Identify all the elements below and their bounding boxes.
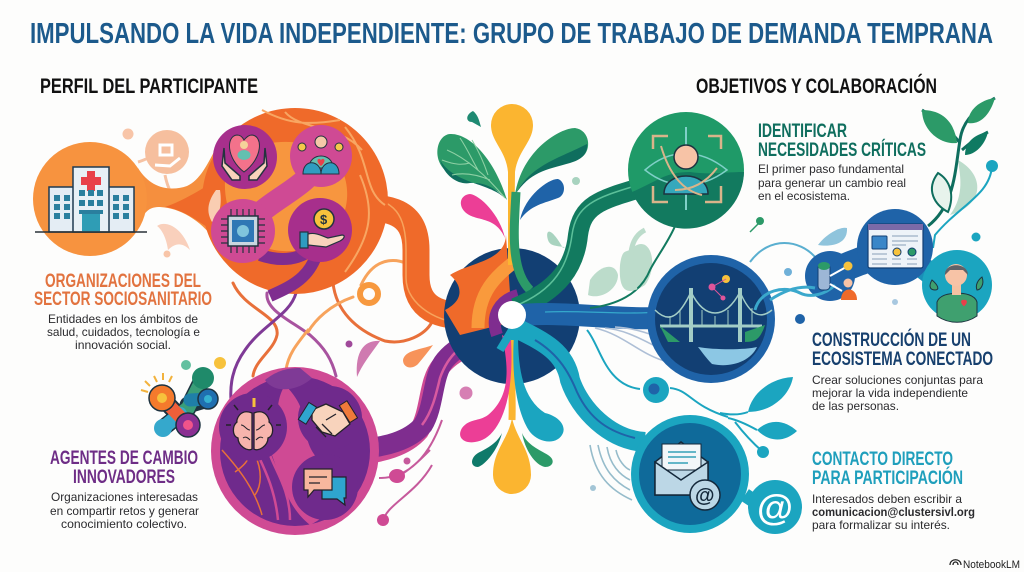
- text: contacto directo para participación: Interesados deben escribir a: [812, 492, 962, 506]
- blue curve to bridge: [512, 314, 660, 318]
- text: identificar necesidades críticas: para generar un cambio real: [758, 176, 906, 190]
- deco peach shapes: [122, 128, 190, 258]
- icon: pink leaf: [461, 194, 505, 238]
- text: organizaciones del sector sociosanitario: ORGANIZACIONES DEL: [45, 270, 201, 292]
- text: agentes de cambio innovadores: [50, 447, 199, 531]
- orange band to hub: [355, 207, 505, 316]
- text: agentes de cambio innovadores: en compartir retos y generar: [50, 504, 199, 518]
- icon: hand with coin: [288, 198, 352, 262]
- panel: email contact: [631, 377, 802, 534]
- icon: hands and heart: [213, 125, 277, 189]
- text: contacto directo para participación: CONTACTO DIRECTO: [812, 448, 953, 470]
- icon: colourful molecule logo: [141, 357, 226, 437]
- text: organizaciones del sector sociosanitario: salud, cuidados, tecnología e: [47, 325, 200, 339]
- @ badge: [748, 480, 802, 534]
- web panel: [857, 209, 933, 285]
- icon: green leaf left: [437, 134, 507, 200]
- text: identificar necesidades críticas: en el ecosistema.: [758, 189, 850, 203]
- neck between hospital and circle: [138, 150, 215, 240]
- text: construcción de un ecosistema conectado: de las personas.: [812, 399, 899, 413]
- heading: objetivos y colaboración: OBJETIVOS Y COLABORACIÓN: [696, 74, 937, 98]
- text: organizaciones del sector sociosanitario: Entidades en los ámbitos de: [48, 312, 198, 326]
- database and people node: [755, 251, 857, 310]
- panel: central hub with petals: [437, 104, 660, 494]
- text: contacto directo para participación: [812, 448, 975, 532]
- green stem: [514, 192, 530, 290]
- green curve to identify circle: [515, 188, 640, 308]
- icon: people and heart: [290, 125, 352, 187]
- icon: green leaf right: [515, 128, 588, 195]
- text: contacto directo para participación: para formalizar su interés.: [812, 518, 950, 532]
- person with heart: [922, 250, 992, 322]
- icon: brain: [219, 393, 287, 461]
- panel: connected ecosystem network: [647, 209, 992, 383]
- text: agentes de cambio innovadores: Organizaciones interesadas: [51, 490, 198, 504]
- notebooklm watermark: NotebookLM: [963, 559, 1020, 571]
- text: agentes de cambio innovadores: conocimiento colectivo.: [61, 517, 187, 531]
- deco magenta sprigs and petals: [346, 340, 472, 526]
- icon: handshake: [298, 386, 362, 450]
- panel: orange organisations network: [33, 108, 505, 323]
- text: identificar necesidades críticas: IDENTIFICAR: [758, 120, 847, 142]
- icon: identify needs green circle: [628, 112, 744, 229]
- bridge circle: [647, 255, 775, 383]
- text: contacto directo para participación: comunicacion@clustersivl.org: [812, 505, 975, 519]
- text: organizaciones del sector sociosanitario: innovación social.: [75, 338, 171, 352]
- envelope: [655, 442, 720, 510]
- icon: blue leaf: [520, 179, 564, 220]
- icon: plant with leaves: [750, 98, 998, 248]
- magenta underlay and purple band to hub: [356, 328, 501, 454]
- icon: chip: [211, 199, 275, 263]
- big orange circle: [202, 108, 388, 294]
- text: identificar necesidades críticas: El primer paso fundamental: [758, 162, 904, 176]
- hub centre: [498, 301, 526, 329]
- text: organizaciones del sector sociosanitario: [34, 270, 212, 352]
- outer pink circle: [211, 367, 379, 535]
- text: agentes de cambio innovadores: AGENTES DE CAMBIO: [50, 447, 198, 469]
- text: construcción de un ecosistema conectado: mejorar la vida independiente: [812, 386, 968, 400]
- heading: perfil del participante: PERFIL DEL PARTICIPANTE: [40, 75, 258, 98]
- text: agentes de cambio innovadores: INNOVADORES: [73, 466, 175, 488]
- panel: purple agents network: [211, 322, 505, 535]
- text: construcción de un ecosistema conectado: Crear soluciones conjuntas para: [812, 373, 983, 387]
- text: construcción de un ecosistema conectado: [812, 327, 993, 413]
- teal leaves: [720, 377, 797, 458]
- icon: top yellow drop: [491, 104, 533, 265]
- @ badge: @: [757, 487, 793, 528]
- deco pale leaves and wave lines: [587, 190, 728, 500]
- text: identificar necesidades críticas: NECESIDADES CRÍTICAS: [758, 138, 926, 161]
- icon: hand with coin: $: [320, 212, 328, 227]
- icon: hospital: [33, 142, 147, 256]
- thin connecting lines between left circles: [231, 261, 432, 400]
- teal curve to email: [510, 325, 645, 442]
- text: contacto directo para participación: PARA PARTICIPACIÓN: [812, 465, 963, 489]
- text: organizaciones del sector sociosanitario: SECTOR SOCIOSANITARIO: [34, 288, 212, 310]
- icon: speech bubbles: [292, 454, 358, 520]
- text: identificar necesidades críticas: [758, 120, 926, 203]
- envelope: @: [695, 485, 715, 507]
- icon: orange ring node: [360, 285, 378, 303]
- petals bottom: [508, 320, 516, 420]
